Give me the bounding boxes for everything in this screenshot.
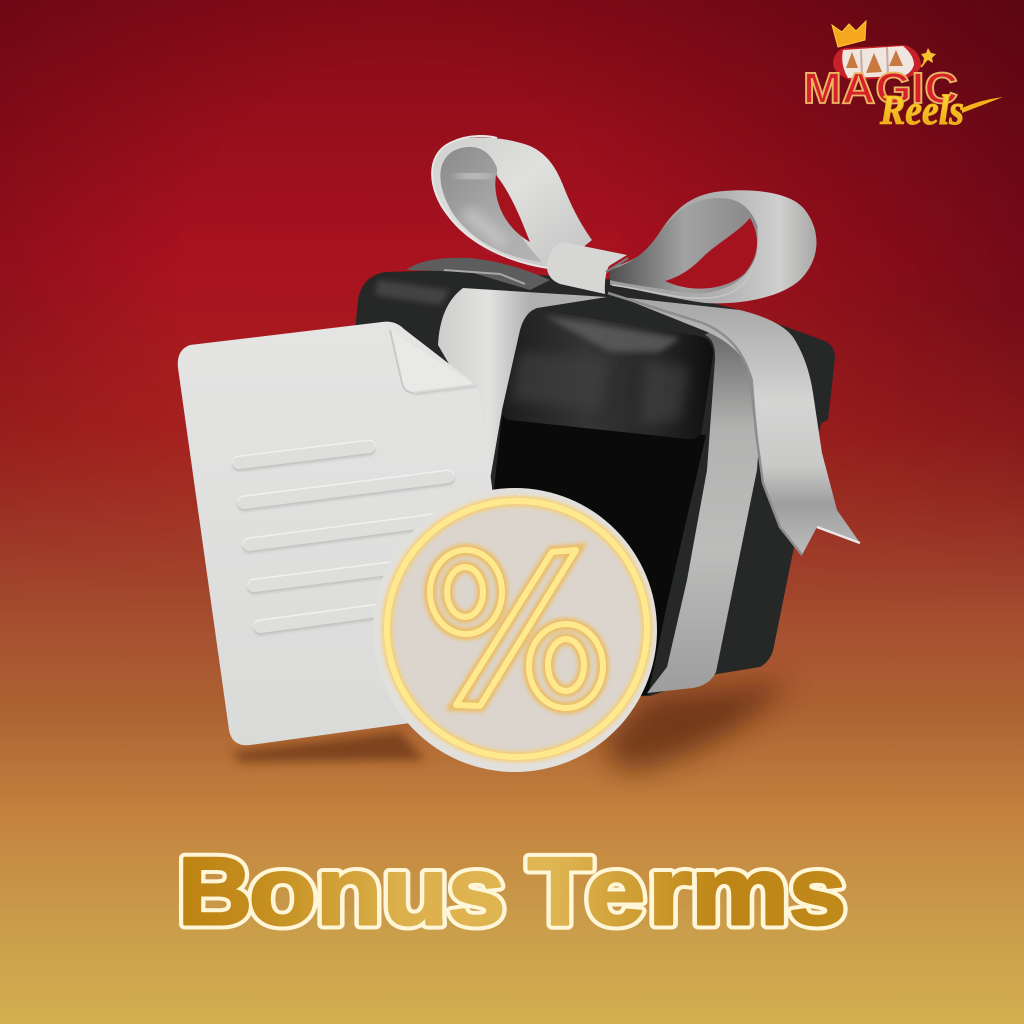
ribbon band: right vertical bbox=[647, 325, 760, 693]
title fill layer: T bbox=[528, 838, 592, 945]
title outline layer: s bbox=[789, 838, 846, 945]
box lid front bbox=[502, 310, 713, 439]
title outline layer: n bbox=[316, 838, 382, 945]
title fill layer: e bbox=[586, 838, 645, 945]
title fill layer: s bbox=[448, 838, 505, 945]
title fill layer: s bbox=[789, 838, 846, 945]
logo MAGIC wordmark: MAGIC bbox=[803, 64, 958, 113]
title fill layer: n bbox=[316, 838, 382, 945]
title outline layer: s bbox=[448, 838, 505, 945]
ribbon band: left on lid bbox=[438, 288, 607, 480]
logo: Magic Reels bbox=[803, 21, 1003, 134]
logo star wand bbox=[921, 48, 936, 67]
title fill layer: B bbox=[178, 838, 252, 945]
title outline layer: B bbox=[178, 838, 252, 945]
gift box bbox=[355, 258, 835, 700]
box top-left highlight bbox=[375, 280, 450, 305]
lid highlight bbox=[545, 316, 680, 352]
paper folded corner bbox=[390, 330, 476, 393]
title outline layer: r bbox=[648, 838, 692, 945]
ribbon tail bbox=[620, 297, 860, 555]
coin glowing ring bbox=[387, 501, 647, 757]
document bbox=[178, 322, 500, 745]
title outline layer: o bbox=[249, 838, 316, 945]
title fill layer: m bbox=[691, 838, 789, 945]
silver ribbon bbox=[432, 136, 860, 693]
title outline layer: u bbox=[383, 838, 448, 945]
ground shadow bbox=[232, 682, 790, 772]
title fill layer bbox=[178, 838, 846, 945]
box top back strip bbox=[406, 258, 550, 290]
title outline layer: e bbox=[586, 838, 645, 945]
title outline layer: m bbox=[691, 838, 789, 945]
title fill layer: o bbox=[249, 838, 316, 945]
logo slot reel bbox=[833, 45, 921, 80]
bow center knot bbox=[547, 242, 628, 294]
logo Reels script: Reels bbox=[879, 88, 964, 134]
percent coin bbox=[373, 488, 657, 772]
logo crown bbox=[832, 21, 866, 47]
title fill layer: r bbox=[648, 838, 692, 945]
paper text lines bbox=[239, 446, 448, 629]
bow right loop bbox=[610, 190, 816, 303]
box front body bbox=[480, 415, 706, 700]
title fill layer: u bbox=[383, 838, 448, 945]
box back and side bbox=[355, 270, 835, 700]
bow left loop bbox=[432, 136, 592, 268]
title outline layer bbox=[178, 838, 846, 945]
title outline layer: T bbox=[528, 838, 592, 945]
coin body bbox=[373, 488, 657, 772]
title: Bonus Terms bbox=[178, 838, 846, 945]
glowing percent sign bbox=[430, 550, 603, 708]
paper sheet bbox=[178, 322, 500, 745]
